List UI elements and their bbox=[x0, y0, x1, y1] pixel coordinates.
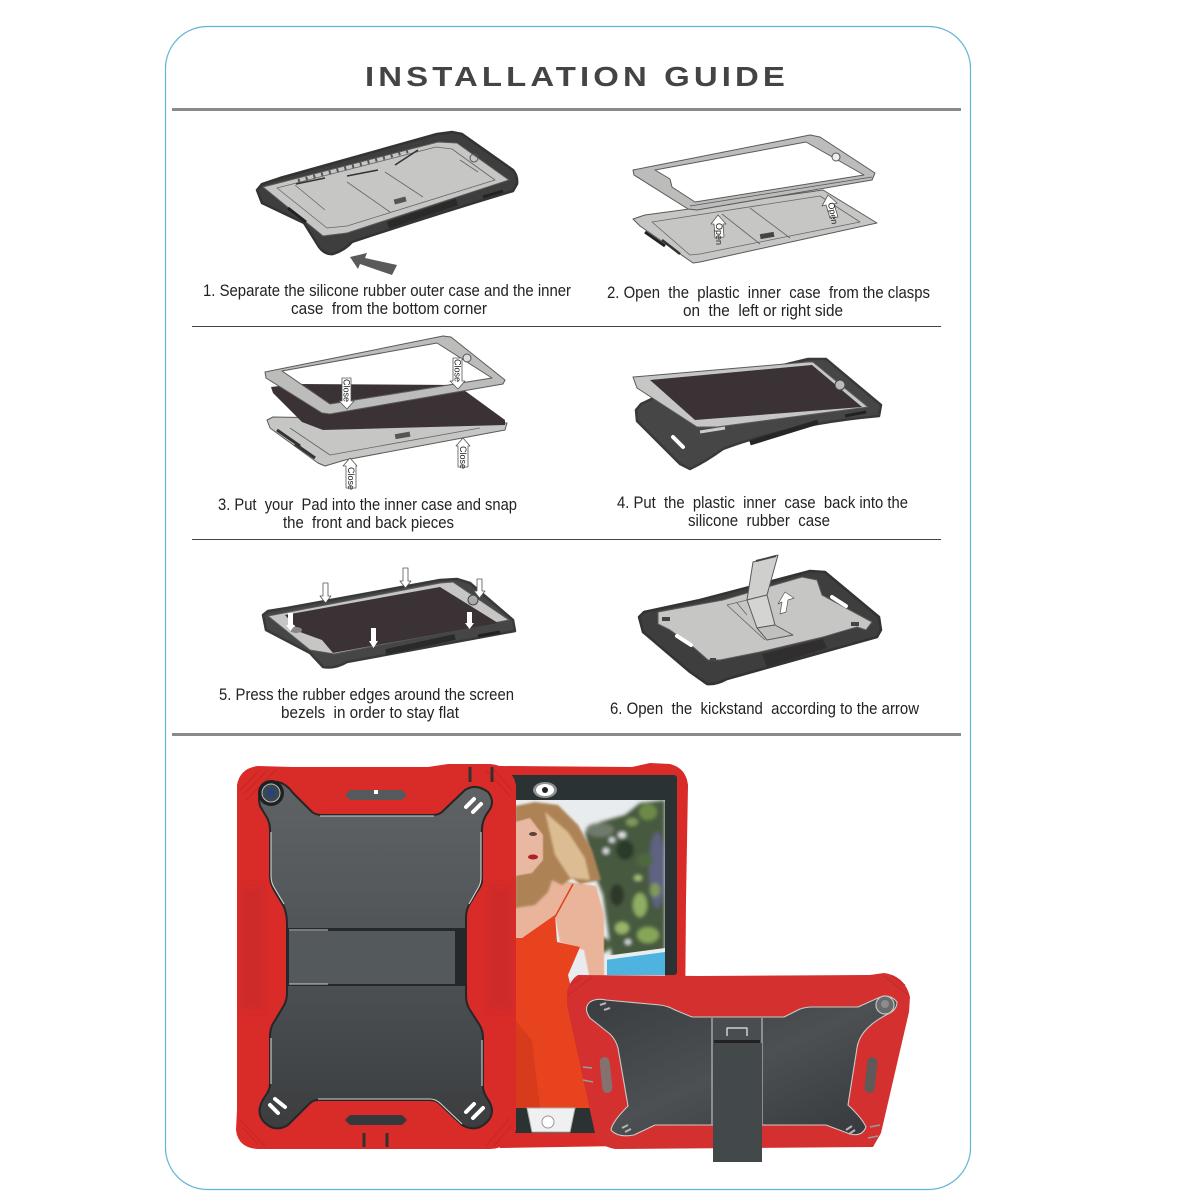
caption: step 4: 4. Put the plastic inner case back into the bbox=[617, 494, 908, 512]
caption: step 5: 5. Press the rubber edges around the screen bbox=[219, 686, 514, 704]
panel: step 4 bbox=[617, 359, 908, 530]
arrow: close top right: Close bbox=[452, 359, 462, 382]
caption: step 4 bbox=[617, 494, 908, 530]
camera lens bbox=[258, 780, 284, 806]
caption: step 3: the front and back pieces bbox=[283, 514, 454, 532]
face bbox=[515, 818, 543, 876]
title: INSTALLATION GUIDE bbox=[365, 61, 789, 92]
slots bbox=[270, 799, 483, 1118]
arrows: hollow and solid press arrows bbox=[286, 568, 485, 648]
camera lens bbox=[876, 996, 894, 1014]
illustration: inner case back into rubber case bbox=[633, 359, 881, 469]
arrow: close bottom left: Close bbox=[346, 467, 356, 490]
caption: step 1: case from the bottom corner bbox=[291, 300, 487, 318]
pool bbox=[607, 950, 665, 975]
caption: step 5: bezels in order to stay flat bbox=[281, 704, 459, 722]
arrow: push towards corner bbox=[350, 253, 397, 275]
side slots bbox=[599, 1057, 878, 1093]
arrow: close top right bbox=[450, 358, 465, 389]
illustration: tablet case separated at corner bbox=[257, 132, 517, 254]
kickstand bbox=[287, 928, 467, 986]
arrow: close bottom right: Close bbox=[458, 446, 468, 469]
skin bbox=[516, 879, 605, 976]
panel: step 6 bbox=[610, 555, 919, 718]
panel: step 1 bbox=[203, 132, 571, 318]
kickstand leg bbox=[713, 1043, 762, 1162]
bottom pill bbox=[345, 1115, 407, 1125]
outer rounded border bbox=[166, 26, 970, 1190]
tablet case back view standing on kickstand bbox=[567, 973, 910, 1162]
caption: step 1: 1. Separate the silicone rubber outer case and the inner bbox=[203, 282, 571, 300]
caption: step 6: 6. Open the kickstand according to the arrow bbox=[610, 700, 919, 718]
arrow: open right clasp: Open bbox=[826, 202, 840, 225]
arrow: close top left: Close bbox=[342, 379, 352, 402]
tablet front in red case bbox=[500, 763, 688, 1148]
illustration: open kickstand bbox=[639, 555, 881, 684]
illustration: pad placed in inner case bbox=[265, 336, 507, 490]
arrow: open left clasp: Open bbox=[714, 223, 724, 245]
home button bbox=[527, 1108, 575, 1132]
arrow: open left clasp bbox=[711, 215, 726, 245]
hair bbox=[515, 802, 601, 908]
caption: step 3 bbox=[218, 496, 517, 532]
top pill bbox=[345, 790, 407, 800]
kickstand top notch bbox=[712, 1018, 762, 1125]
caption: step 5 bbox=[219, 686, 514, 722]
arrow: open right clasp bbox=[822, 195, 840, 225]
panel: step 3 bbox=[218, 336, 517, 532]
arrow: close bottom left bbox=[343, 458, 357, 490]
tablet case back view with kickstand bbox=[236, 764, 516, 1149]
arrow: close top left bbox=[339, 378, 354, 409]
caption: step 2: 2. Open the plastic inner case from the clasps bbox=[607, 284, 930, 302]
caption: step 4: silicone rubber case bbox=[688, 512, 830, 530]
dress bbox=[515, 915, 592, 1108]
caption: step 2: on the left or right side bbox=[683, 302, 843, 320]
caption: step 1 bbox=[203, 282, 571, 318]
caption: step 3: 3. Put your Pad into the inner case and snap bbox=[218, 496, 517, 514]
illustration: press rubber edges bbox=[263, 568, 515, 667]
panel: step 5 bbox=[219, 568, 515, 722]
caption: step 2 bbox=[607, 284, 930, 320]
infographic page bbox=[164, 26, 972, 1190]
back panel bbox=[259, 782, 492, 1128]
panel: step 2 bbox=[607, 135, 930, 320]
product photo: red case front and back bbox=[236, 763, 910, 1162]
screen photo: woman in red dress bbox=[515, 800, 665, 1108]
illustration: inner case opened bbox=[633, 135, 877, 263]
back panel bbox=[586, 996, 897, 1136]
arrow: close bottom right bbox=[456, 438, 470, 469]
trees bbox=[585, 800, 665, 958]
camera opening bbox=[533, 782, 557, 798]
